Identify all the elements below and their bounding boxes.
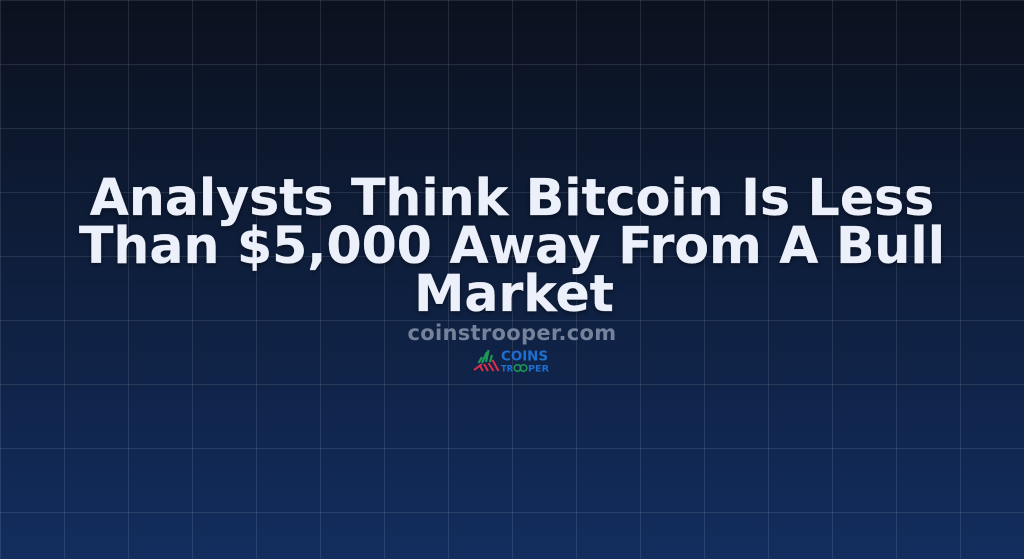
site name: coinstrooper.com	[408, 321, 616, 345]
title: Market	[414, 264, 614, 323]
icon: red peak	[474, 360, 498, 371]
logo word: trooper	[501, 364, 549, 374]
logo word: trooper: PER	[528, 364, 549, 374]
logo word: coins: COINS	[501, 350, 548, 364]
title: Analysts Think Bitcoin Is Less	[90, 168, 934, 227]
logo word: trooper: TR	[501, 364, 513, 374]
title: Than $5,000 Away From A Bull	[79, 216, 945, 275]
icon: green peak	[478, 350, 492, 363]
title	[78, 168, 945, 323]
icon: coinstrooper logo	[474, 350, 549, 374]
